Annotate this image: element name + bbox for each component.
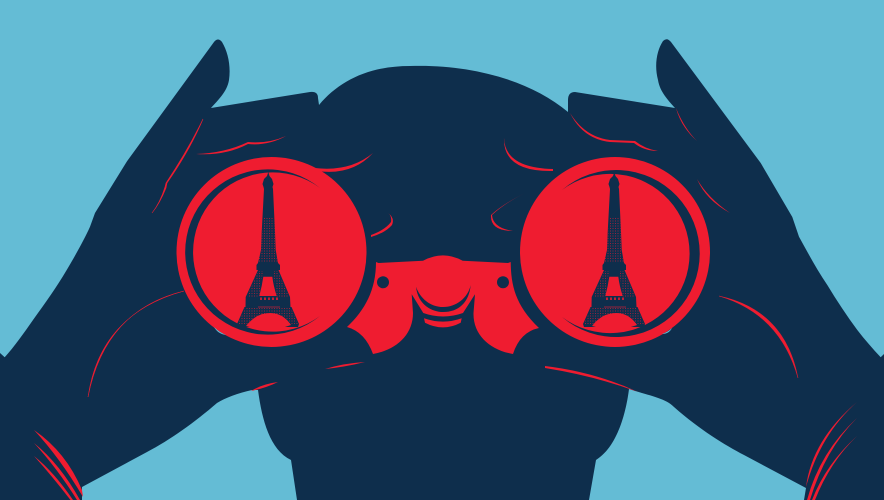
lower band of bridge (424, 318, 462, 327)
left binocular lens (176, 157, 366, 347)
right eyepiece dot (497, 276, 509, 288)
red contour lines on hands and head (88, 108, 798, 397)
left eyepiece dot (377, 276, 389, 288)
binocular bridge (347, 255, 539, 354)
right binocular lens (520, 157, 710, 347)
light slivers beside lens bottoms (214, 327, 672, 335)
left wrist lines (34, 430, 83, 500)
right wrist lines (806, 402, 857, 500)
crescent under central dome (416, 285, 471, 312)
